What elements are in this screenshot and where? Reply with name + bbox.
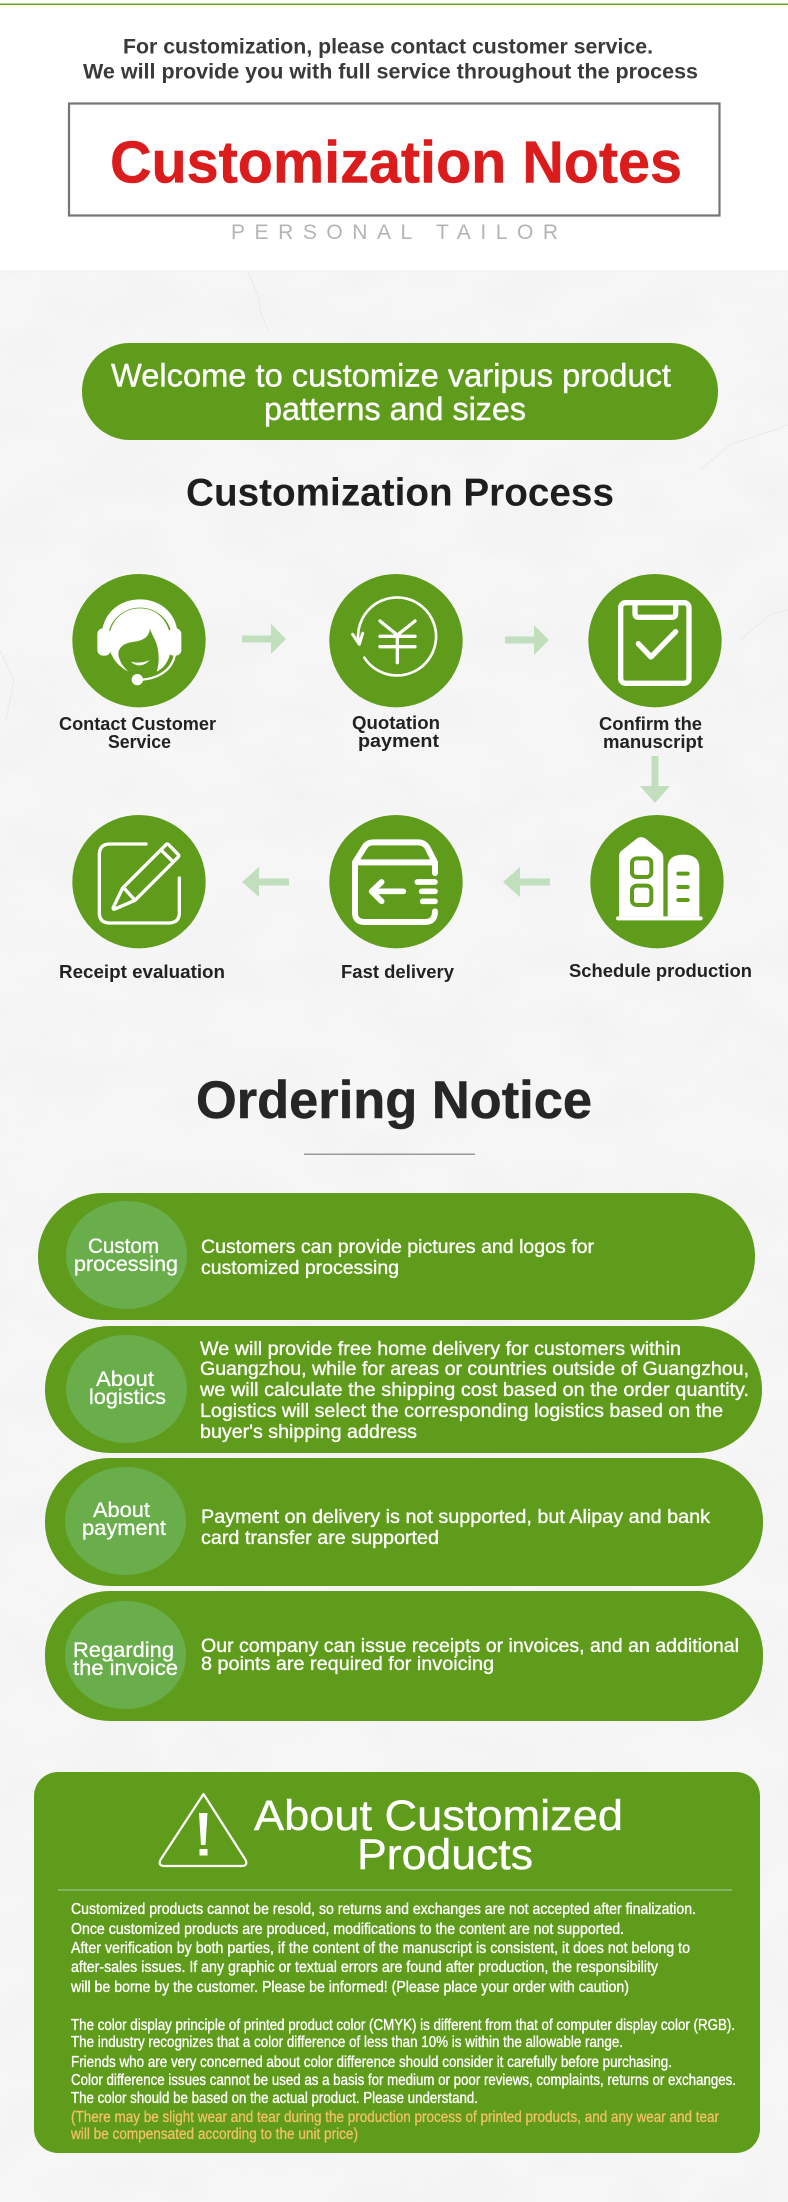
notice: about logistics: buyer's shipping address <box>200 1421 417 1443</box>
header section background <box>0 0 788 270</box>
notice: regarding the invoice: Regarding <box>73 1639 174 1662</box>
text block: returns policy: Customized products cannot be resold, so returns and exchanges are not accepted after finalization. <box>71 1901 696 1918</box>
intro text: We will provide you with full service throughout the process <box>83 60 698 84</box>
text block: wear and tear note: (There may be slight wear and tear during the production process of printed products, and any wear and tear <box>71 2109 719 2126</box>
notice: custom processing <box>38 1193 755 1320</box>
panel heading: About Customized <box>254 1792 623 1840</box>
title box <box>69 104 720 216</box>
step 6: receipt evaluation <box>59 815 225 982</box>
label: payment <box>358 730 439 751</box>
arrow: step 2 to 3 <box>505 625 549 655</box>
icon: yen cycle <box>329 574 463 707</box>
notice: custom processing: processing <box>74 1253 178 1276</box>
icon: pencil on note <box>72 815 206 948</box>
icon: headset agent <box>72 574 206 707</box>
text block: color difference: The industry recognizes that a color difference of less than 10% is within the allowable range. <box>71 2034 623 2051</box>
notice: about payment: payment <box>82 1517 166 1540</box>
text block: returns policy: after-sales issues. If any graphic or textual errors are found after production, the responsibility <box>71 1959 658 1976</box>
text block: returns policy: will be borne by the customer. Please be informed! (Please place your order with caution) <box>70 1979 629 1996</box>
heading: customization process: Customization Process <box>186 472 614 514</box>
divider under heading <box>304 1154 475 1155</box>
text block: wear and tear note <box>70 2109 719 2143</box>
step 5: fast delivery <box>329 815 463 982</box>
label <box>352 712 440 751</box>
label: Confirm the <box>599 713 702 734</box>
label: Fast delivery <box>341 961 455 982</box>
panel heading: Products <box>357 1831 533 1879</box>
label <box>599 713 703 752</box>
subtitle: personal tailor: PERSONAL TAILOR <box>231 221 558 244</box>
intro text <box>83 36 698 84</box>
notice: about logistics <box>45 1326 762 1453</box>
heading: ordering notice: Ordering Notice <box>196 1071 592 1130</box>
label: Receipt evaluation <box>59 961 225 982</box>
label: manuscript <box>603 731 703 752</box>
icon: warning triangle <box>160 1794 246 1866</box>
step 4: schedule production <box>569 815 752 981</box>
arrow: step 3 to 4 <box>640 756 670 803</box>
notice: about payment: Payment on delivery is not supported, but Alipay and bank <box>201 1506 710 1528</box>
notice: custom processing: customized processing <box>201 1257 399 1279</box>
label: Service <box>108 731 171 752</box>
icon: factory buildings <box>590 815 724 948</box>
step 1: contact customer service <box>59 574 216 752</box>
text block: color difference: The color should be based on the actual product. Please understand. <box>71 2090 478 2107</box>
text block: wear and tear note: will be compensated according to the unit price) <box>70 2126 358 2143</box>
step 2: quotation payment <box>329 574 463 751</box>
arrow: step 5 to 6 <box>242 867 289 897</box>
welcome banner: patterns and sizes <box>264 391 526 427</box>
arrow: step 1 to 2 <box>242 624 286 654</box>
panel: about customized products <box>34 1772 760 2153</box>
notice: regarding the invoice: the invoice <box>73 1657 178 1680</box>
notice: about logistics: Logistics will select the corresponding logistics based on the <box>200 1400 723 1422</box>
notice: regarding the invoice: 8 points are required for invoicing <box>201 1653 494 1675</box>
text block: returns policy: After verification by both parties, if the content of the manuscript is consistent, it does not belong to <box>71 1940 690 1957</box>
label <box>59 713 216 752</box>
notice: custom processing: Custom <box>88 1235 159 1258</box>
notice: about logistics: Guangzhou, while for areas or countries outside of Guangzhou, <box>200 1358 749 1380</box>
notice: about payment <box>45 1458 763 1586</box>
welcome banner: Welcome to customize varipus product <box>111 358 671 394</box>
text block: color difference: Friends who are very concerned about color difference should consider it carefully before purchasing. <box>71 2054 672 2071</box>
intro text: For customization, please contact customer service. <box>123 36 653 58</box>
notice: about payment: About <box>93 1499 150 1522</box>
icon: delivery box <box>329 815 463 948</box>
notice: about logistics: we will calculate the shipping cost based on the order quantity. <box>199 1379 749 1401</box>
notice: regarding the invoice: Our company can issue receipts or invoices, and an additional <box>201 1635 739 1657</box>
text block: color difference <box>71 2017 736 2107</box>
step 3: confirm the manuscript <box>588 574 722 752</box>
panel heading <box>254 1792 623 1879</box>
text block: returns policy <box>70 1901 696 1996</box>
notice: about payment: card transfer are supported <box>201 1527 439 1549</box>
label: Quotation <box>352 712 440 733</box>
label: Contact Customer <box>59 713 216 734</box>
icon: clipboard check <box>588 574 722 707</box>
label: Schedule production <box>569 960 752 981</box>
notice: regarding the invoice <box>45 1591 763 1721</box>
text block: returns policy: Once customized products are produced, modifications to the content are not supported. <box>71 1921 624 1938</box>
notice: about logistics: We will provide free home delivery for customers within <box>200 1338 681 1360</box>
title box: Customization Notes <box>110 130 682 196</box>
welcome banner <box>82 343 718 440</box>
notice: about logistics: logistics <box>89 1386 166 1409</box>
notice: about logistics: About <box>96 1368 154 1391</box>
arrow: step 4 to 5 <box>503 867 550 897</box>
notice: custom processing: Customers can provide pictures and logos for <box>201 1236 594 1258</box>
